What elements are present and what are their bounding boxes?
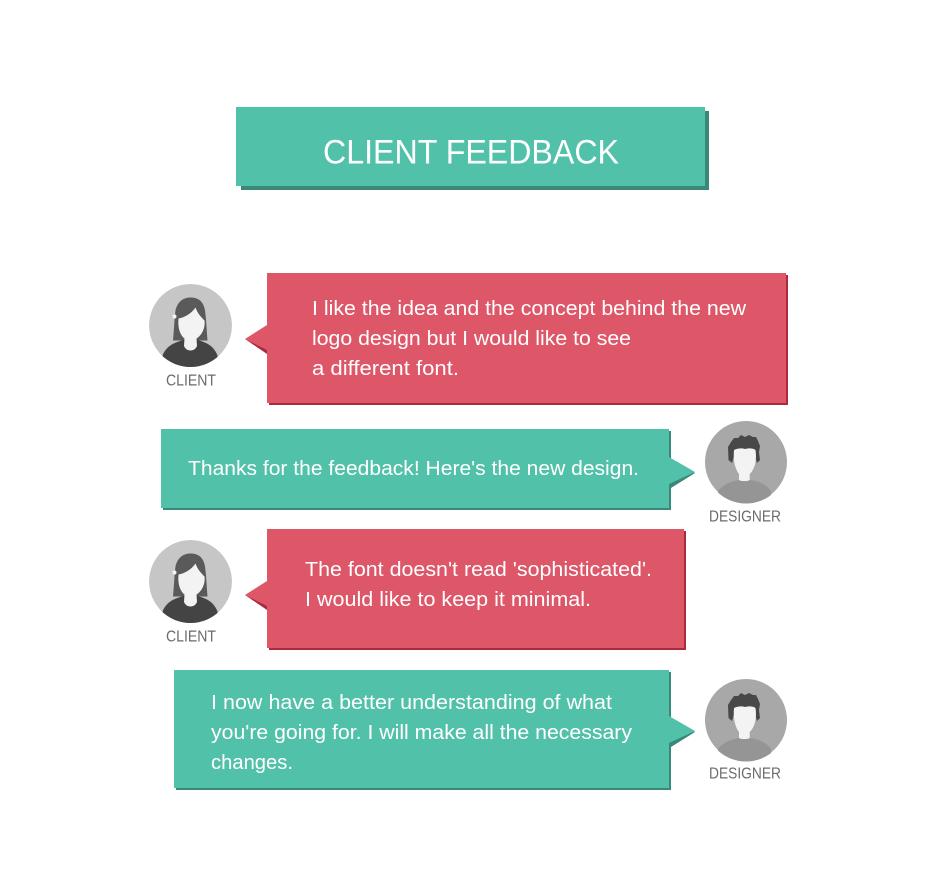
designer message 1: [161, 429, 695, 510]
client message 1: [245, 273, 788, 405]
designer avatar 2: [705, 679, 787, 782]
title: CLIENT FEEDBACK: [323, 134, 619, 172]
client message 1: I like the idea and the concept behind the new: [312, 297, 746, 320]
designer message 2: [174, 670, 695, 790]
client message 2: The font doesn't read 'sophisticated'.: [305, 558, 652, 581]
label: CLIENT: [166, 628, 216, 646]
client message 2: I would like to keep it minimal.: [305, 588, 591, 611]
client avatar 2: [149, 540, 232, 646]
designer message 1: Thanks for the feedback! Here's the new design.: [188, 457, 639, 480]
client message 2: [245, 529, 686, 650]
designer message 2: you're going for. I will make all the necessary: [211, 721, 633, 744]
designer message 2: I now have a better understanding of what: [211, 691, 612, 714]
label: DESIGNER: [709, 766, 781, 782]
designer avatar 1: [705, 421, 787, 526]
client message 1: a different font.: [312, 357, 459, 380]
client avatar 1: [149, 284, 232, 390]
client message 1: logo design but I would like to see: [312, 327, 631, 350]
designer message 2: changes.: [211, 751, 293, 774]
label: DESIGNER: [709, 508, 781, 526]
label: CLIENT: [166, 372, 216, 390]
title banner: [236, 107, 709, 190]
